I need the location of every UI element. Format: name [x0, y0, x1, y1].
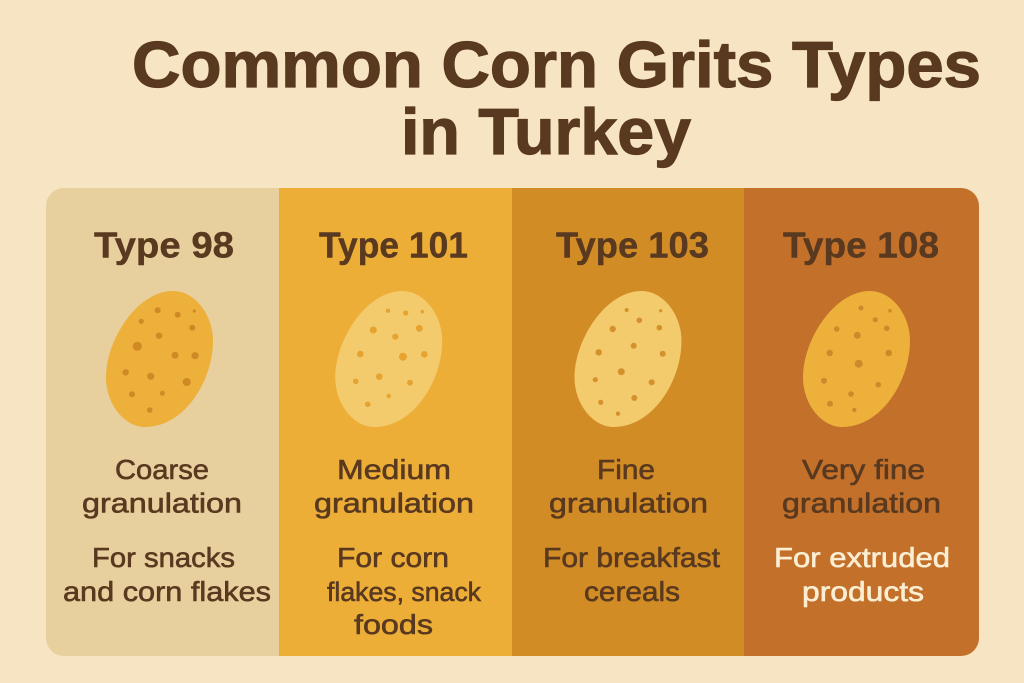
text: granulation 98: Coarse — [115, 454, 209, 485]
text: use 108: products — [802, 576, 924, 607]
text: granulation 101: granulation — [314, 488, 474, 518]
text: use 101: foods — [354, 609, 433, 640]
text: use 101 — [327, 548, 482, 634]
text: use 103: cereals — [584, 576, 680, 607]
title: Common Corn Grits Types — [132, 28, 981, 101]
heading: type 103: Type 103 — [556, 224, 709, 266]
text: use 108: For extruded — [774, 542, 950, 573]
text: granulation 103: granulation — [549, 488, 708, 518]
text: granulation 108 — [782, 454, 941, 518]
text: use 101: flakes, snack — [327, 577, 482, 607]
panel: type 108 column — [744, 188, 979, 656]
heading: type 108: Type 108 — [783, 224, 939, 266]
text: use 98: For snacks — [92, 542, 235, 573]
text: use 103 — [545, 546, 720, 602]
title — [132, 28, 981, 168]
panel: type 101 column — [279, 188, 512, 656]
title: in Turkey — [401, 95, 691, 168]
heading: type 98: Type 98 — [94, 224, 234, 266]
text: granulation 98: granulation — [82, 488, 242, 518]
panel: type 103 column — [512, 188, 744, 656]
icon: medium corn grit — [335, 291, 442, 427]
text: granulation 103 — [549, 454, 708, 518]
text: granulation 101: Medium — [337, 454, 451, 485]
icon: coarse corn grit — [106, 291, 213, 427]
text: granulation 98 — [82, 454, 242, 518]
text: use 101: For corn — [337, 542, 449, 573]
text: use 108 — [774, 542, 950, 607]
text: granulation 103: Fine — [597, 454, 655, 485]
text: granulation 108: Very fine — [802, 454, 925, 485]
text: use 103: For breakfast — [543, 542, 720, 573]
icon: fine corn grit — [574, 291, 682, 427]
icon: very fine corn grit — [803, 291, 910, 427]
panel: grits types table — [46, 188, 979, 656]
text: use 98: and corn flakes — [63, 576, 271, 607]
text: granulation 108: granulation — [782, 488, 941, 518]
text: granulation 101 — [314, 454, 474, 518]
panel: type 98 column — [46, 188, 279, 656]
heading: type 101: Type 101 — [319, 224, 468, 266]
text: use 98 — [64, 546, 270, 602]
